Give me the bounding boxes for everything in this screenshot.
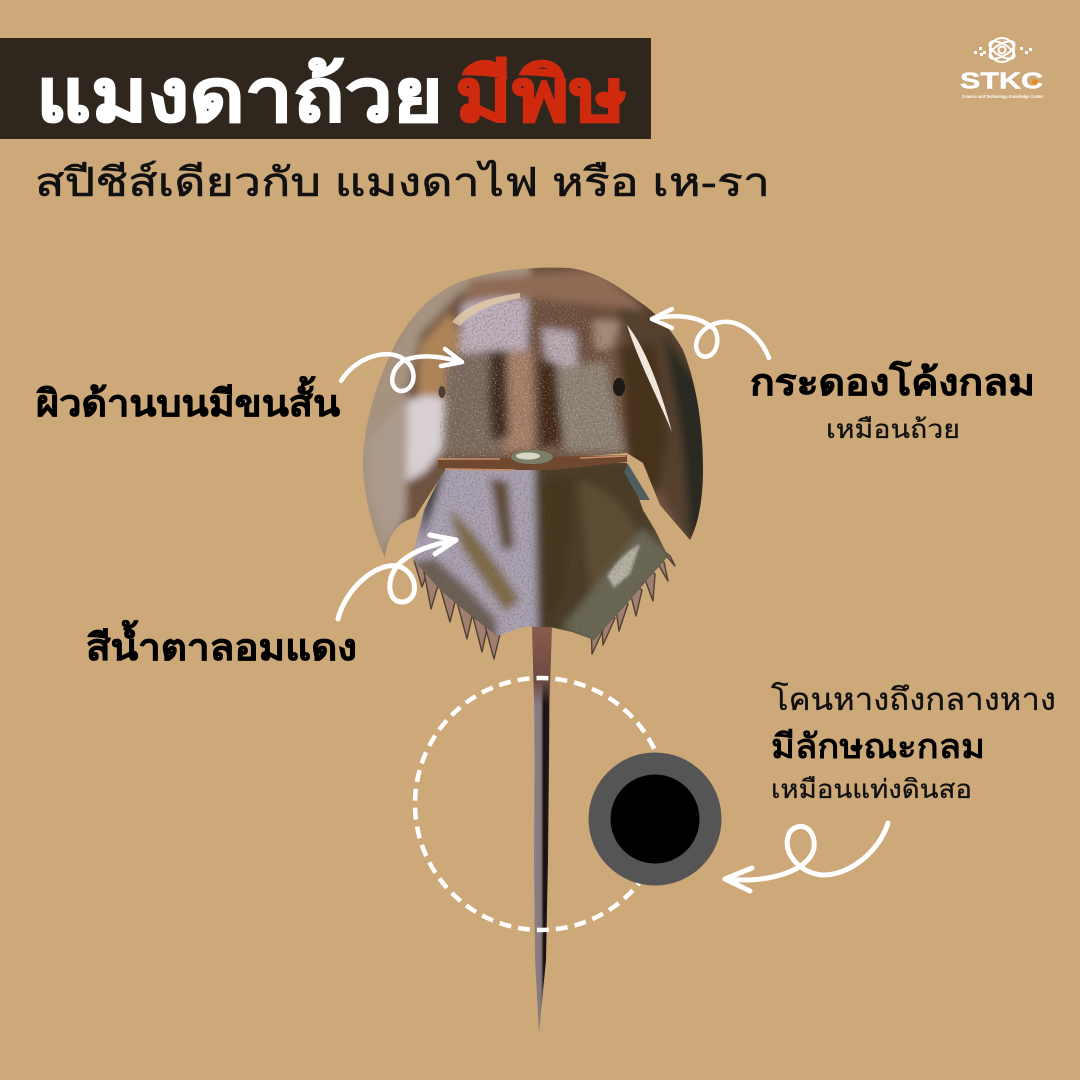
label: tail description: โคนหางถึงกลางหาง (771, 682, 1056, 717)
central lobes (442, 350, 500, 455)
logo: STKC: STKC (960, 68, 1043, 94)
abdomen (412, 463, 668, 640)
shell highlight (627, 325, 672, 432)
subtitle: สปีชีส์เดียวกับ แมงดาไฟ หรือ เห-รา (35, 160, 770, 205)
label: like a bowl: เหมือนถ้วย (826, 414, 960, 444)
title banner (0, 38, 651, 139)
label: dome shell: กระดองโค้งกลม (750, 360, 1035, 403)
right rim (616, 292, 694, 540)
logo: STKC: Science and Technology Knowledge Center (962, 94, 1043, 99)
label: round: มีลักษณะกลม (771, 728, 985, 766)
label: reddish brown: สีน้ำตาลอมแดง (86, 620, 357, 668)
arrow: rough surface (341, 349, 462, 391)
carapace (363, 268, 703, 558)
logo: STKC (960, 38, 1043, 99)
title text red: มีพิษ (455, 54, 627, 137)
arrow: tail (725, 823, 888, 891)
horseshoe crab photo (363, 268, 703, 1032)
label: tail description (771, 682, 1056, 804)
white patch (406, 396, 449, 482)
top band (460, 270, 645, 312)
tail cross-section: round section (588, 752, 722, 886)
left rim (362, 268, 535, 558)
tail cross-section: dashed circle (415, 678, 667, 930)
tail (533, 625, 551, 1033)
label: like a pencil: เหมือนแท่งดินสอ (771, 774, 972, 804)
gold patch (418, 312, 462, 402)
arrow: reddish brown (338, 535, 456, 619)
eyes (613, 378, 625, 396)
label: rough surface: ผิวด้านบนมีขนสั้น (36, 376, 340, 424)
title text white: แมงดาถ้วย (36, 54, 443, 137)
left lavender lobe (460, 297, 528, 358)
arrow: shell dome (652, 309, 769, 358)
abdomen spines (414, 546, 675, 659)
hinge (438, 450, 650, 500)
tail base (532, 625, 552, 705)
